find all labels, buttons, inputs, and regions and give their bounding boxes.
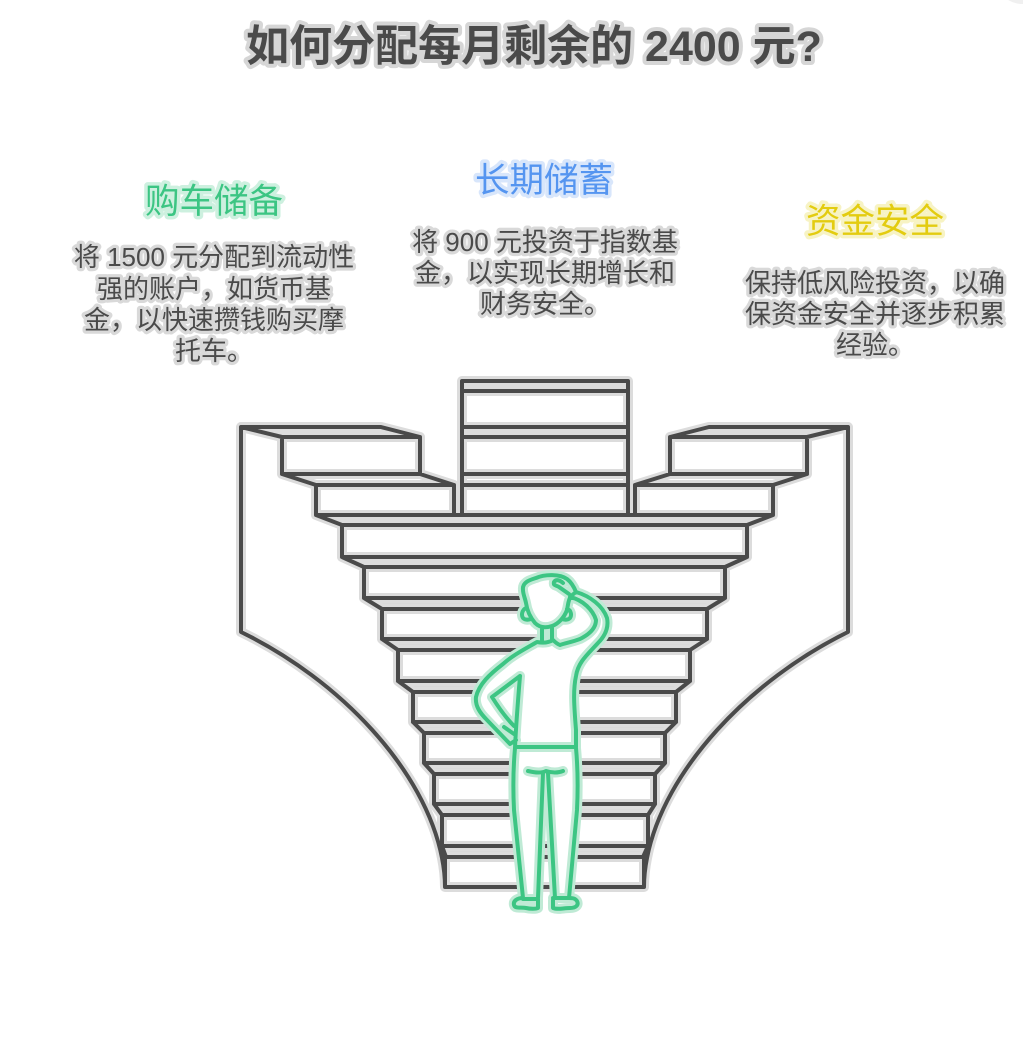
text block: car savings: [74, 242, 354, 366]
heading: capital safety: 资金安全: [806, 203, 944, 241]
icon: person scratching head: [476, 575, 608, 909]
panel: long-term savings: [412, 162, 678, 319]
heading: car savings: 购车储备: [145, 183, 283, 221]
text block: capital safety: 保资金安全并逐步积累: [745, 299, 1005, 329]
text block: capital safety: 经验。: [836, 330, 914, 360]
text block: capital safety: [745, 268, 1005, 360]
text block: capital safety: 保持低风险投资，以确: [745, 268, 1005, 298]
artifact: corner speck: [1008, 0, 1023, 4]
text block: long-term savings: [412, 227, 678, 319]
text block: car savings: 将 1500 元分配到流动性: [74, 242, 354, 272]
text block: car savings: 强的账户，如货币基: [97, 274, 331, 304]
panel: car savings: [74, 183, 354, 366]
panel: capital safety: [745, 203, 1005, 360]
heading: long-term savings: 长期储蓄: [475, 162, 613, 200]
text block: long-term savings: 将 900 元投资于指数基: [412, 227, 678, 257]
text block: car savings: 托车。: [175, 336, 253, 366]
chart: branching staircase: [241, 381, 848, 887]
text block: car savings: 金，以快速攒钱购买摩: [84, 305, 344, 335]
text block: long-term savings: 金，以实现长期增长和: [415, 258, 675, 288]
text block: long-term savings: 财务安全。: [480, 289, 610, 319]
title: 如何分配每月剩余的 2400 元?: [246, 23, 822, 71]
